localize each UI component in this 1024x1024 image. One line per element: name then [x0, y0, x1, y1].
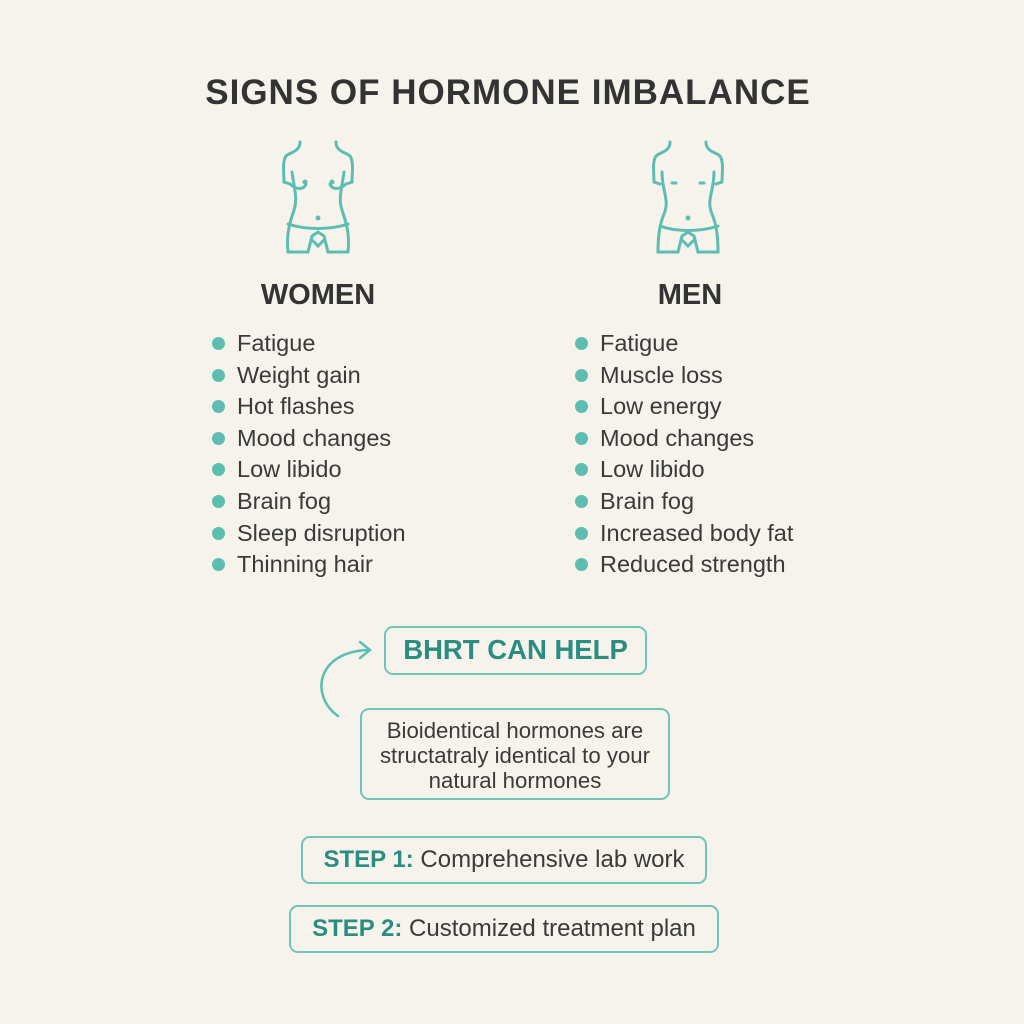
list: women — [212, 330, 406, 577]
title: SIGNS OF HORMONE IMBALANCE — [205, 73, 811, 112]
box: bioidentical description: structatraly identical to your — [380, 743, 650, 768]
box: bioidentical description: natural hormones — [429, 768, 601, 793]
list: women: Brain fog — [237, 488, 331, 514]
box: BHRT can help: BHRT CAN HELP — [403, 634, 628, 665]
list: women: Sleep disruption — [237, 520, 406, 546]
list: women: Weight gain — [237, 362, 361, 388]
list: women: Hot flashes — [237, 393, 355, 419]
list: women: Low libido — [237, 456, 342, 482]
list: men: Fatigue — [600, 330, 678, 356]
box: step 1 — [301, 836, 707, 884]
arrow — [320, 640, 372, 718]
box: bioidentical description — [360, 708, 670, 800]
icon: female body — [282, 140, 354, 254]
list: women: Thinning hair — [237, 551, 373, 577]
list: women: Fatigue — [237, 330, 315, 356]
list: women: Mood changes — [237, 425, 391, 451]
icon: male body — [652, 140, 724, 254]
box: bioidentical description: Bioidentical hormones are — [387, 718, 643, 743]
box: step 2 — [289, 905, 719, 953]
list: men: Mood changes — [600, 425, 754, 451]
list: men: Muscle loss — [600, 362, 723, 388]
heading: men: MEN — [658, 279, 722, 311]
list: men: Reduced strength — [600, 551, 786, 577]
box: BHRT can help — [384, 626, 647, 675]
list: men: Low libido — [600, 456, 705, 482]
box: step 1: STEP 1: Comprehensive lab work — [323, 846, 685, 873]
box: step 2: STEP 2: Customized treatment plan — [312, 915, 696, 942]
list: men — [575, 330, 794, 577]
list: men: Brain fog — [600, 488, 694, 514]
heading: women: WOMEN — [261, 279, 375, 311]
list: men: Increased body fat — [600, 520, 793, 546]
list: men: Low energy — [600, 393, 722, 419]
